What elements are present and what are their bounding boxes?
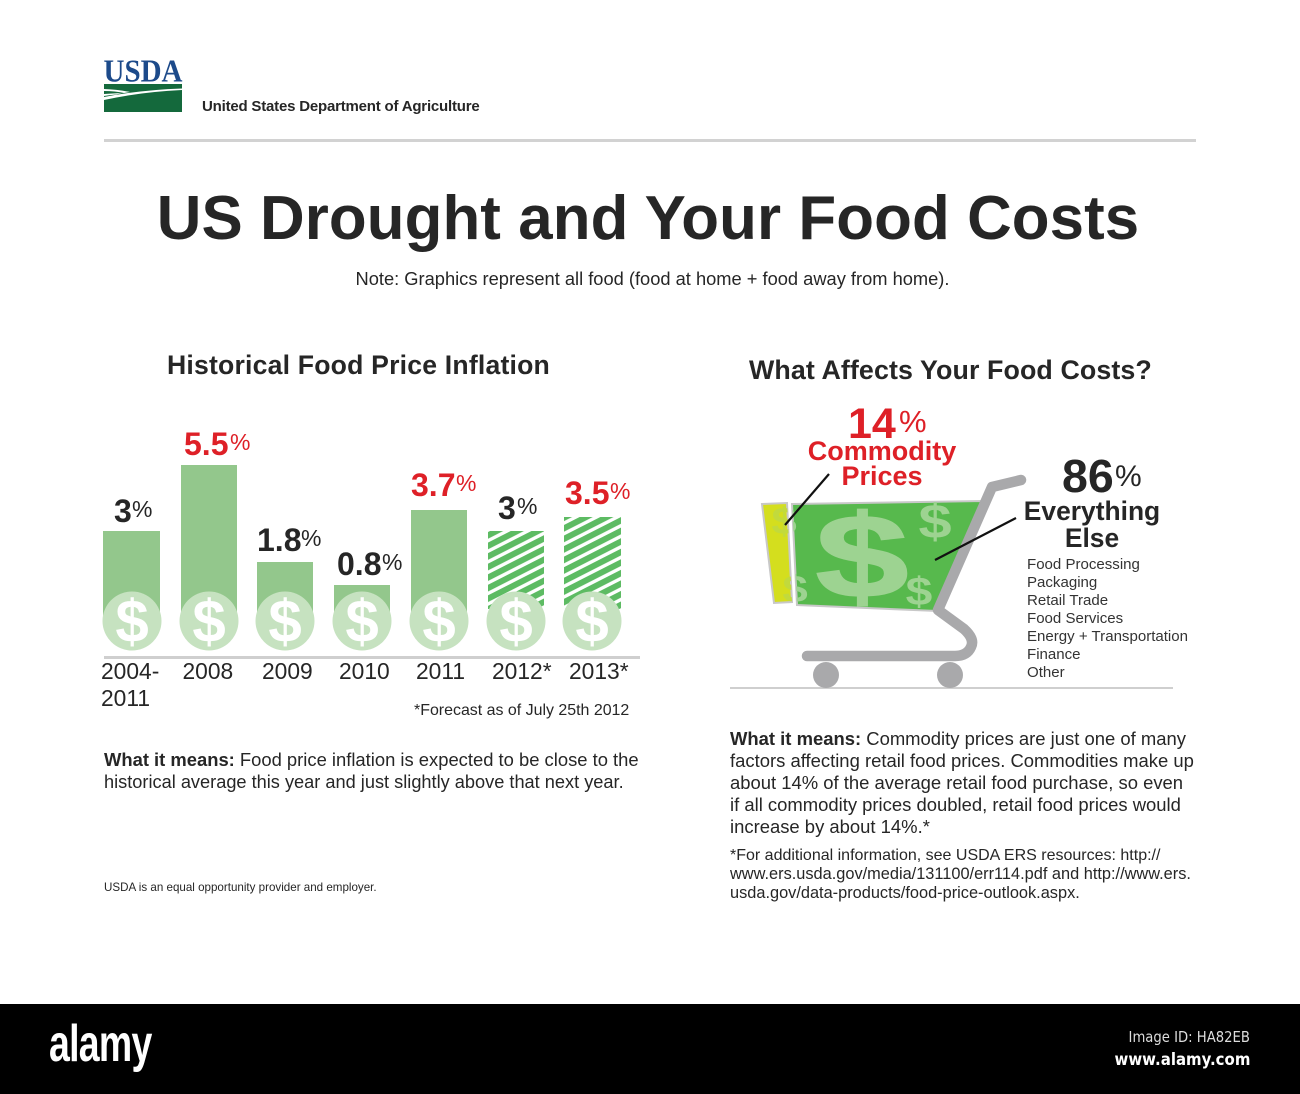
watermark logo: alamy — [49, 1015, 152, 1073]
shopping cart chart — [730, 400, 1188, 689]
value labels: 3 — [498, 490, 516, 526]
dollar coins — [102, 588, 622, 655]
basket dollar signs: $ — [782, 568, 808, 610]
cost factors list: Retail Trade — [1027, 592, 1108, 609]
axis — [104, 656, 640, 659]
year labels — [101, 658, 629, 711]
forecast note: *Forecast as of July 25th 2012 — [414, 702, 629, 719]
basket dollar signs: $ — [815, 490, 909, 622]
heading: historical inflation: Historical Food Price Inflation — [167, 350, 550, 380]
title: US Drought and Your Food Costs — [157, 184, 1139, 253]
86% callout: Else — [1065, 523, 1119, 553]
basket dollar signs: $ — [906, 570, 932, 614]
department name: United States Department of Agriculture — [202, 98, 480, 115]
cost factors list: Finance — [1027, 646, 1081, 663]
right explanation: if all commodity prices doubled, retail food prices would — [730, 794, 1181, 815]
year labels: 2013* — [569, 658, 629, 684]
86% callout — [1024, 450, 1160, 553]
year labels: 2011 — [101, 685, 150, 711]
cost factors list: Food Services — [1027, 610, 1123, 627]
right explanation: about 14% of the average retail food purchase, so even — [730, 772, 1183, 793]
value labels: % — [382, 549, 402, 575]
year labels: 2008 — [182, 658, 233, 684]
right explanation: increase by about 14%.* — [730, 816, 930, 837]
year labels: 2011 — [416, 658, 465, 684]
14% callout — [808, 400, 956, 491]
14% callout: Commodity — [808, 436, 956, 466]
dollar coins: $ — [192, 588, 226, 655]
86% callout: Everything — [1024, 496, 1160, 526]
equal opportunity statement: USDA is an equal opportunity provider and employer. — [104, 881, 377, 894]
86% callout: % — [1115, 460, 1142, 493]
dollar coins: $ — [268, 588, 302, 655]
value labels: 3.5 — [565, 475, 609, 511]
basket dollar signs — [772, 502, 951, 608]
value labels: % — [456, 470, 476, 496]
additional information: usda.gov/data-products/food-price-outlook.aspx. — [730, 884, 1080, 902]
right explanation — [730, 728, 1194, 837]
bars — [103, 465, 621, 621]
value labels: 3.7 — [411, 467, 455, 503]
bar chart — [102, 408, 1187, 718]
cost factors list — [1027, 556, 1188, 681]
cart basket: commodity share — [762, 503, 792, 603]
basket dollar signs: $ — [771, 500, 797, 542]
value labels: % — [230, 429, 250, 455]
14% callout: Prices — [841, 461, 923, 491]
header rule — [104, 139, 1196, 142]
note: Note: Graphics represent all food (food at home + food away from home). — [356, 268, 949, 289]
dollar coins: $ — [575, 588, 609, 655]
14% callout: 14 — [848, 400, 896, 448]
watermark url: www.alamy.com — [1114, 1050, 1250, 1070]
cost factors list: Packaging — [1027, 574, 1097, 591]
dollar coins: $ — [499, 588, 533, 655]
additional information: www.ers.usda.gov/media/131100/err114.pdf and http://www.ers. — [730, 865, 1191, 883]
value labels: 3 — [114, 493, 132, 529]
value labels: 5.5 — [184, 426, 228, 462]
USDA logo: USDA — [104, 52, 182, 88]
leader lines — [785, 474, 1016, 560]
cart basket: everything else share — [792, 501, 982, 611]
wheels — [813, 662, 963, 688]
basket dollar signs: $ — [782, 568, 808, 610]
right explanation: factors affecting retail food prices. Commodities make up — [730, 750, 1194, 771]
left explanation: historical average this year and just slightly above that next year. — [104, 772, 624, 792]
value labels: 1.8 — [257, 522, 301, 558]
year labels: 2010 — [339, 658, 390, 684]
cost factors list: Other — [1027, 664, 1065, 681]
left explanation — [104, 749, 639, 792]
value labels — [114, 426, 630, 582]
year labels: 2009 — [262, 658, 313, 684]
right explanation: What it means: Commodity prices are just one of many — [730, 728, 1186, 749]
value labels: % — [301, 525, 321, 551]
cost factors list: Food Processing — [1027, 556, 1140, 573]
additional information: *For additional information, see USDA ERS resources: http:// — [730, 847, 1160, 864]
cart frame — [807, 480, 1021, 656]
year labels: 2012* — [492, 658, 552, 684]
heading: what affects costs: What Affects Your Food Costs? — [749, 355, 1152, 385]
86% callout: 86 — [1062, 450, 1114, 502]
value labels: % — [610, 478, 630, 504]
basket dollar signs: $ — [771, 500, 797, 542]
ground line — [730, 687, 1173, 689]
additional information — [730, 847, 1191, 902]
basket dollar signs: $ — [918, 495, 952, 549]
image id: Image ID: HA82EB — [1129, 1028, 1250, 1046]
left explanation: What it means: Food price inflation is expected to be close to the — [104, 749, 639, 770]
watermark footer band — [0, 1004, 1300, 1094]
year labels: 2004- — [101, 658, 159, 684]
value labels: % — [132, 496, 152, 522]
14% callout: % — [899, 404, 927, 439]
value labels: % — [517, 493, 537, 519]
value labels: 0.8 — [337, 546, 381, 582]
dollar coins: $ — [422, 588, 456, 655]
dollar coins: $ — [115, 588, 149, 655]
dollar coins: $ — [345, 588, 379, 655]
cost factors list: Energy + Transportation — [1027, 628, 1188, 645]
